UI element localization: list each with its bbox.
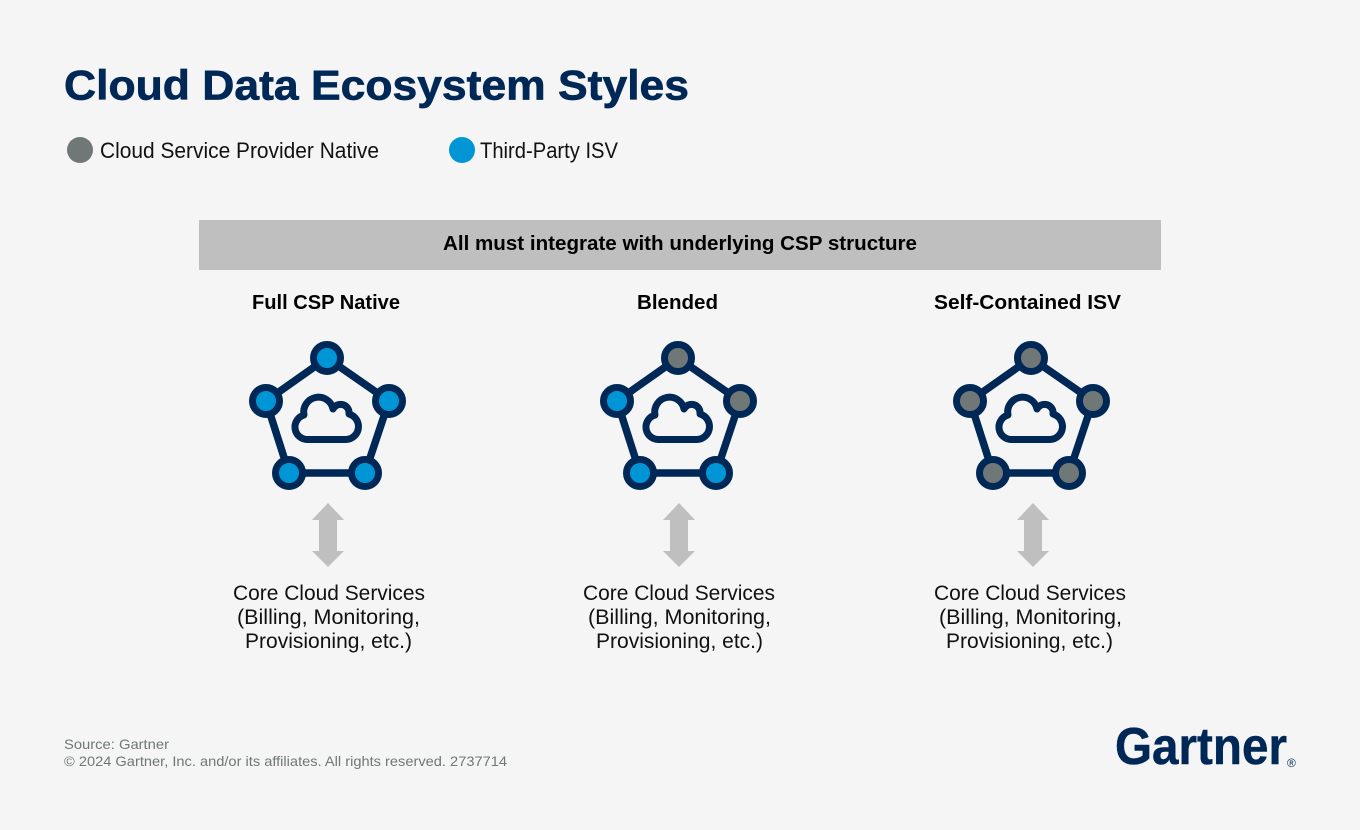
text: core cloud services: Provisioning, etc.) (596, 630, 763, 653)
panel: self-contained ISV (934, 292, 1126, 653)
text: core cloud services: Core Cloud Services (934, 582, 1126, 605)
banner: integration requirement: All must integrate with underlying CSP structure (443, 233, 917, 255)
icon: pentagon network with all gray nodes (956, 344, 1106, 486)
text: core cloud services: Core Cloud Services (583, 582, 775, 605)
text: core cloud services (583, 582, 775, 653)
arrow: double-headed (663, 503, 695, 567)
heading: self-contained ISV: Self-Contained ISV (934, 292, 1122, 314)
text: core cloud services: Provisioning, etc.) (245, 630, 412, 653)
heading: full CSP native: Full CSP Native (252, 292, 400, 314)
legend item: third-party ISV: Third-Party ISV (480, 138, 618, 163)
source note: Source: Gartner (64, 736, 169, 752)
banner: integration requirement (199, 220, 1161, 270)
icon: pentagon network with all blue nodes (252, 344, 402, 486)
logo: Gartner: Gartner (1115, 718, 1287, 776)
text: core cloud services: (Billing, Monitoring, (237, 606, 420, 629)
legend (67, 137, 618, 163)
icon: pentagon network with mixed nodes (604, 344, 754, 486)
logo: Gartner: ® (1287, 756, 1296, 770)
source note (64, 736, 507, 769)
text: core cloud services: (Billing, Monitoring, (939, 606, 1122, 629)
heading: blended: Blended (637, 292, 718, 314)
arrow: double-headed (312, 503, 344, 567)
text: core cloud services (233, 582, 425, 653)
text: core cloud services: Provisioning, etc.) (946, 630, 1113, 653)
arrow: double-headed (1017, 503, 1049, 567)
text: core cloud services: Core Cloud Services (233, 582, 425, 605)
legend item: cloud service provider native: Cloud Service Provider Native (100, 138, 379, 163)
text: core cloud services (934, 582, 1126, 653)
source note: © 2024 Gartner, Inc. and/or its affiliates. All rights reserved. 2737714 (64, 753, 507, 769)
text: core cloud services: (Billing, Monitoring, (588, 606, 771, 629)
panel: blended (583, 292, 775, 653)
title: Cloud Data Ecosystem Styles (64, 62, 689, 108)
panel: full CSP native (233, 292, 425, 653)
